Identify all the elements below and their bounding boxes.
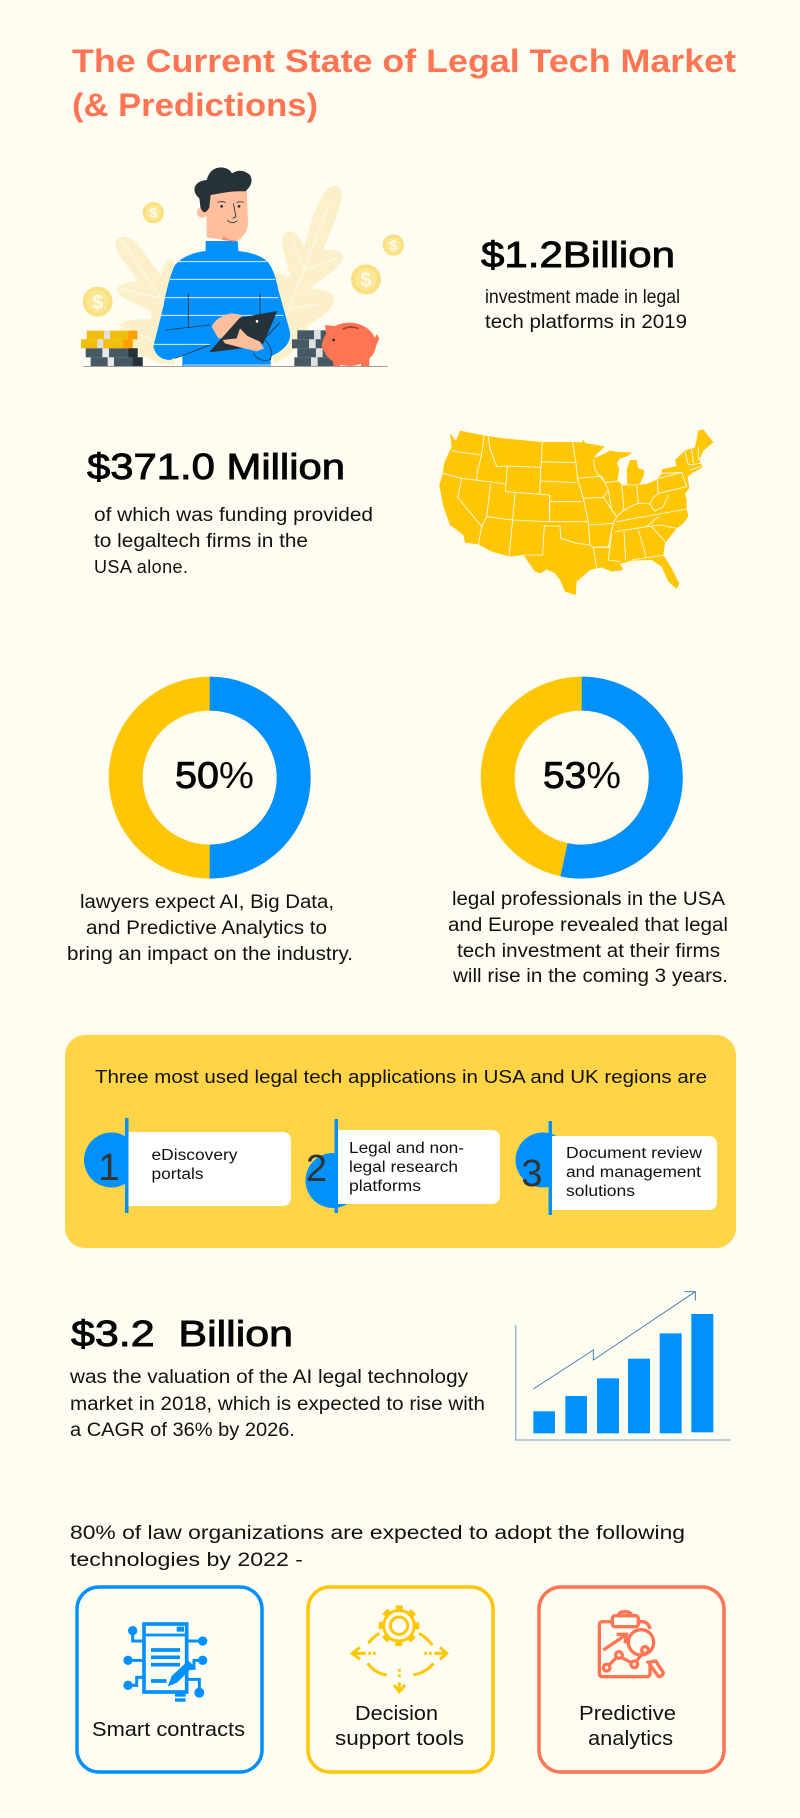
donut chart: 53% (498, 694, 666, 862)
ground line (83, 365, 388, 368)
item 1: eDiscovery portals (84, 1118, 291, 1213)
text: 80 percent adoption intro: 80% of law organizations are expected to adopt the following (70, 1523, 685, 1544)
icon: tablet and hands (209, 311, 277, 352)
icon: gear with arrows (352, 1608, 447, 1692)
label: support tools (335, 1728, 464, 1750)
title: (& Predictions) (72, 87, 318, 123)
map landmass (439, 429, 713, 595)
stat: 3.2 billion: was the valuation of the AI legal technology (69, 1367, 469, 1388)
icon: coins: $ (149, 205, 157, 221)
label (335, 1703, 464, 1750)
donut chart: 50%: 50% (175, 755, 254, 796)
item 2: legal research: Legal and non- (349, 1140, 464, 1157)
donut caption: 53%: will rise in the coming 3 years. (452, 966, 728, 987)
shirt stripes and creases (154, 262, 283, 365)
title (72, 43, 736, 123)
icon: smart contract document (123, 1624, 207, 1702)
stat: 3.2 billion: $3.2 Billion (71, 1313, 293, 1354)
donut caption: 53%: and Europe revealed that legal (448, 915, 728, 936)
icon: coins: $ (360, 270, 372, 292)
item 1: eDiscovery portals: eDiscovery (152, 1147, 238, 1164)
item 2: legal research: platforms (349, 1178, 421, 1195)
donut caption: 53%: legal professionals in the USA (452, 889, 725, 910)
item 2: legal research (306, 1119, 500, 1213)
donut caption: 53%: tech investment at their firms (457, 941, 720, 962)
item 2: legal research: legal research (349, 1159, 458, 1176)
stat: 3.2 billion (69, 1313, 485, 1441)
man's shirt (153, 241, 290, 366)
item 1: eDiscovery portals: 1 (98, 1147, 120, 1189)
label (579, 1703, 676, 1750)
stat: 3.2 billion: market in 2018, which is expected to rise with (70, 1394, 485, 1415)
item 3: document review: solutions (566, 1183, 635, 1200)
icon: coins: $ (92, 292, 103, 314)
donut caption: 50% (67, 892, 353, 965)
stat: 371.0 million: USA alone. (94, 557, 188, 577)
donut caption: 53% (448, 889, 728, 987)
donut chart: 50% (126, 694, 294, 862)
stat: 371.0 million: $371.0 Million (87, 446, 345, 487)
illustration: man with tablet, coins and piggy bank (81, 167, 404, 367)
chart bars (533, 1314, 713, 1433)
title: The Current State of Legal Tech Market (72, 43, 736, 79)
item 3: document review: Document review (566, 1145, 703, 1162)
panel heading: Three most used legal tech applications in USA and UK regions are (95, 1066, 707, 1087)
item 3: document review: 3 (521, 1153, 543, 1195)
bar chart with rising arrow (516, 1292, 731, 1440)
text: 80 percent adoption intro (70, 1523, 685, 1571)
stat: 371.0 million: to legaltech firms in the (94, 531, 308, 552)
stat: 1.2 billion: tech platforms in 2019 (485, 312, 687, 333)
card: predictive analytics (539, 1587, 724, 1772)
icon: leaves (115, 186, 343, 365)
icon: gold and dark money stacks (81, 330, 334, 366)
card: decision support tools (308, 1587, 493, 1772)
stat: 1.2 billion (481, 234, 687, 333)
stat: 3.2 billion: a CAGR of 36% by 2026. (70, 1420, 295, 1441)
stat: 371.0 million (87, 446, 373, 577)
map of the USA (439, 429, 713, 595)
icon: clipboard with magnifier (599, 1612, 663, 1677)
map state borders (443, 436, 702, 568)
icon: coins: $ (389, 237, 397, 253)
man's head (194, 167, 252, 242)
icon: piggy bank (322, 323, 379, 367)
item 2: legal research: 2 (306, 1148, 327, 1190)
donut caption: 50%: lawyers expect AI, Big Data, (80, 892, 334, 913)
donut caption: 50%: bring an impact on the industry. (67, 944, 353, 965)
icon: rising arrow (533, 1292, 695, 1389)
stat: 1.2 billion: $1.2Billion (481, 234, 675, 275)
item 3: document review (516, 1121, 717, 1215)
item 3: document review: and management (566, 1164, 702, 1181)
card: smart contracts (77, 1587, 262, 1772)
icon: coins (83, 202, 404, 317)
donut chart: 53%: 53% (543, 755, 621, 796)
donut caption: 50%: and Predictive Analytics to (86, 918, 327, 939)
label: Predictive (579, 1703, 676, 1725)
label: Decision (355, 1703, 438, 1725)
stat: 1.2 billion: investment made in legal (485, 287, 680, 308)
label: Smart contracts (92, 1719, 245, 1741)
stat: 371.0 million: of which was funding provided (94, 505, 373, 526)
label: analytics (588, 1728, 673, 1750)
text: 80 percent adoption intro: technologies by 2022 - (70, 1550, 303, 1571)
panel: most used applications (65, 1035, 736, 1248)
chart axes (516, 1325, 731, 1440)
item 1: eDiscovery portals: portals (152, 1166, 204, 1183)
